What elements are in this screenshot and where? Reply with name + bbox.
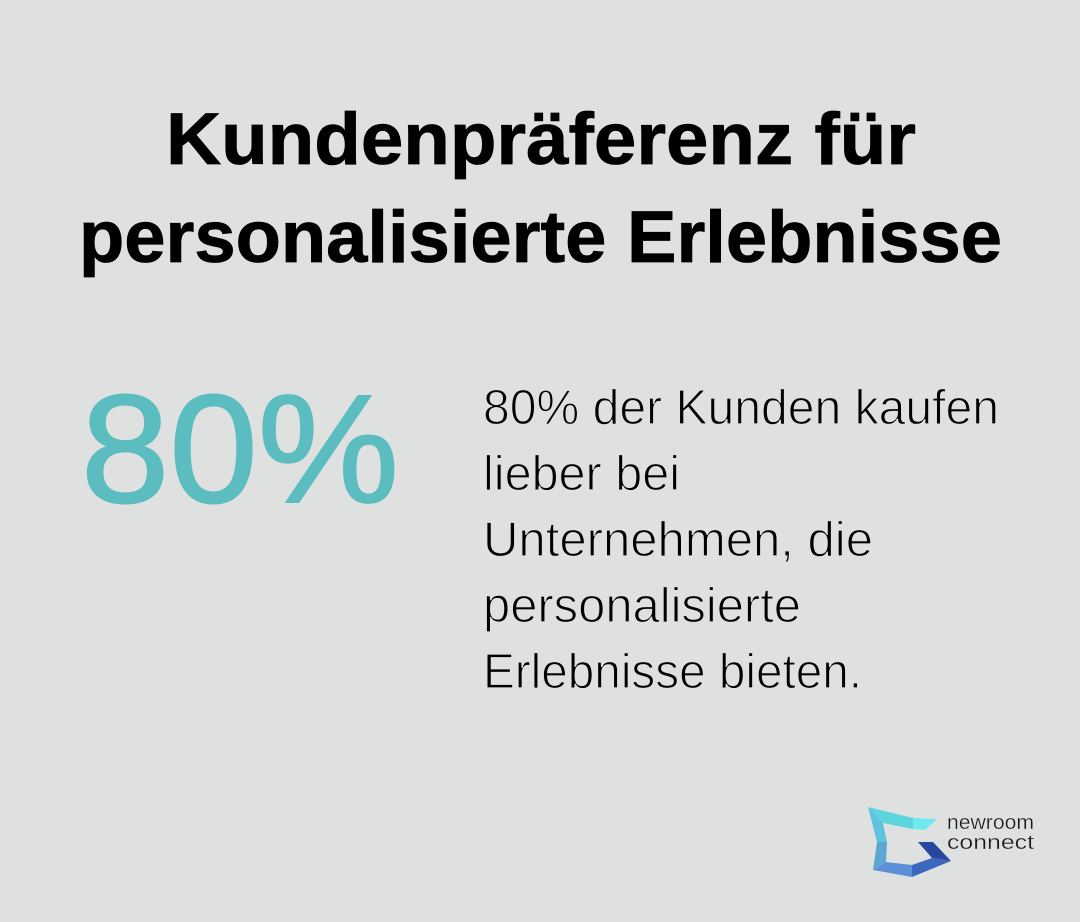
logo wordmark: connect [947,832,1035,854]
title [79,99,1002,278]
title: personalisierte Erlebnisse [79,197,1002,278]
logo wordmark: newroom [947,812,1034,834]
description text: personalisierte [483,579,801,633]
description text: Unternehmen, die [483,513,873,567]
icon: logo mark [868,807,951,877]
statistic: 80%: 80% [81,363,399,535]
description text [483,381,999,699]
description text: lieber bei [483,447,680,501]
logo: newroom connect [868,807,1035,877]
description text: 80% der Kunden kaufen [483,381,999,435]
description text: Erlebnisse bieten. [483,645,862,699]
title: Kundenpräferenz für [166,99,916,180]
logo wordmark [947,812,1035,854]
